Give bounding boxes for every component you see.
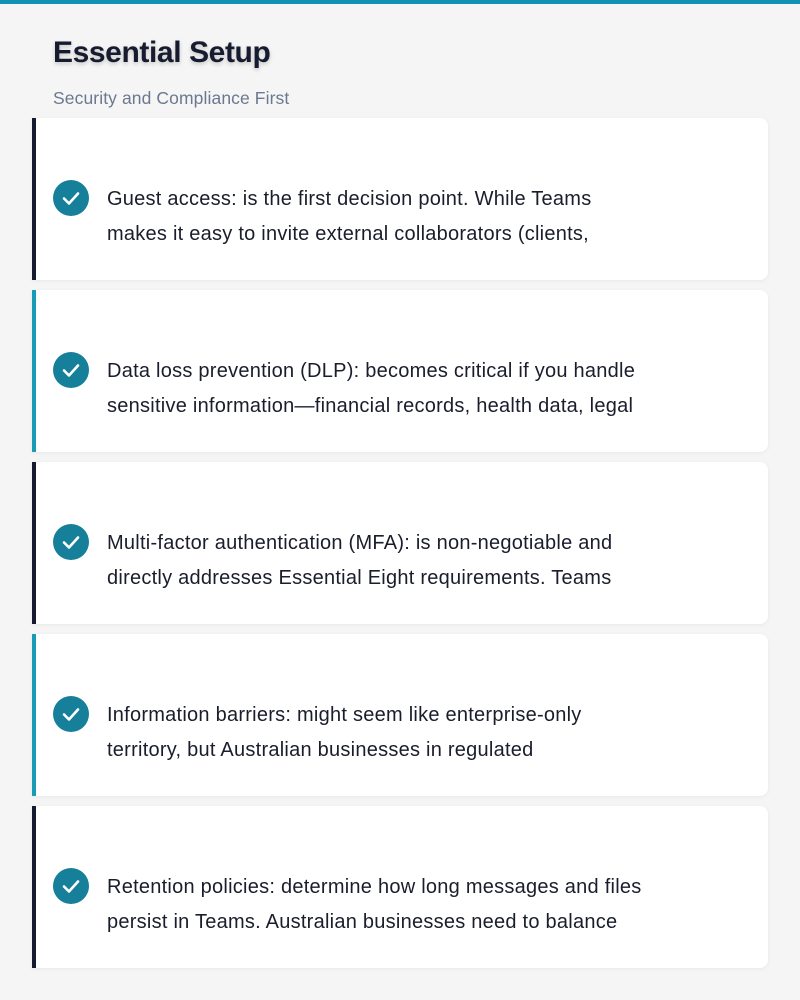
icon: check: [53, 524, 89, 560]
icon: check: [53, 868, 89, 904]
text: makes it easy to invite external collaborators (clients,: [107, 223, 589, 245]
card: information barriers: [32, 634, 768, 796]
text: Retention policies: determine how long messages and files: [107, 876, 642, 898]
icon: check: [53, 180, 89, 216]
subtitle: Security and Compliance First: [53, 88, 289, 108]
text: persist in Teams. Australian businesses need to balance: [107, 911, 617, 933]
card: retention: [32, 806, 768, 968]
text: sensitive information—financial records, health data, legal: [107, 395, 633, 417]
text: territory, but Australian businesses in regulated: [107, 739, 534, 761]
card: guest access: [32, 118, 768, 280]
card: MFA: [32, 462, 768, 624]
text: directly addresses Essential Eight requirements. Teams: [107, 567, 611, 589]
text: [107, 876, 642, 933]
text: Guest access: is the first decision point. While Teams: [107, 188, 591, 210]
icon: check: [53, 352, 89, 388]
card: DLP: [32, 290, 768, 452]
title: Essential Setup: [53, 36, 270, 69]
text: [107, 188, 591, 245]
icon: check: [53, 696, 89, 732]
text: [107, 532, 612, 589]
text: Data loss prevention (DLP): becomes critical if you handle: [107, 360, 635, 382]
text: [107, 704, 582, 761]
text: Multi-factor authentication (MFA): is non-negotiable and: [107, 532, 612, 554]
text: [107, 360, 635, 417]
text: Information barriers: might seem like enterprise-only: [107, 704, 582, 726]
